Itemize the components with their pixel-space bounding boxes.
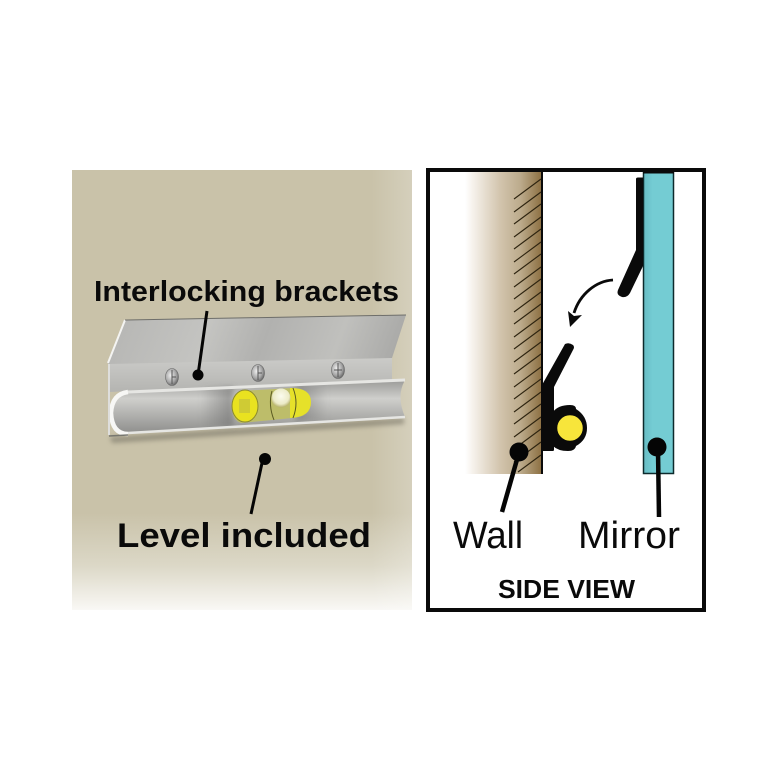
label: Mirror: Mirror [578,515,680,557]
label: SIDE VIEW: SIDE VIEW [498,574,635,604]
label: Wall: Wall [453,515,523,557]
heading: Interlocking brackets: Interlocking brackets [94,276,399,308]
yellow bubble vial [232,388,311,423]
panel frame [428,170,704,610]
leader: level pointer [251,453,271,514]
screws [166,362,344,386]
wall [465,172,542,474]
arrow [568,280,613,327]
wall bracket with level [542,343,587,451]
bracket with level [108,315,406,443]
mirror [644,172,674,474]
leader: mirror [648,438,666,517]
level tube channel [113,380,405,433]
yellow level circle [556,414,584,442]
panel: side view diagram [428,170,704,610]
mirror bracket [618,178,643,297]
heading: Level included: Level included [117,517,371,555]
panel: level photo [72,170,412,610]
leader: wall [502,442,528,512]
leader: brackets pointer [192,311,207,380]
